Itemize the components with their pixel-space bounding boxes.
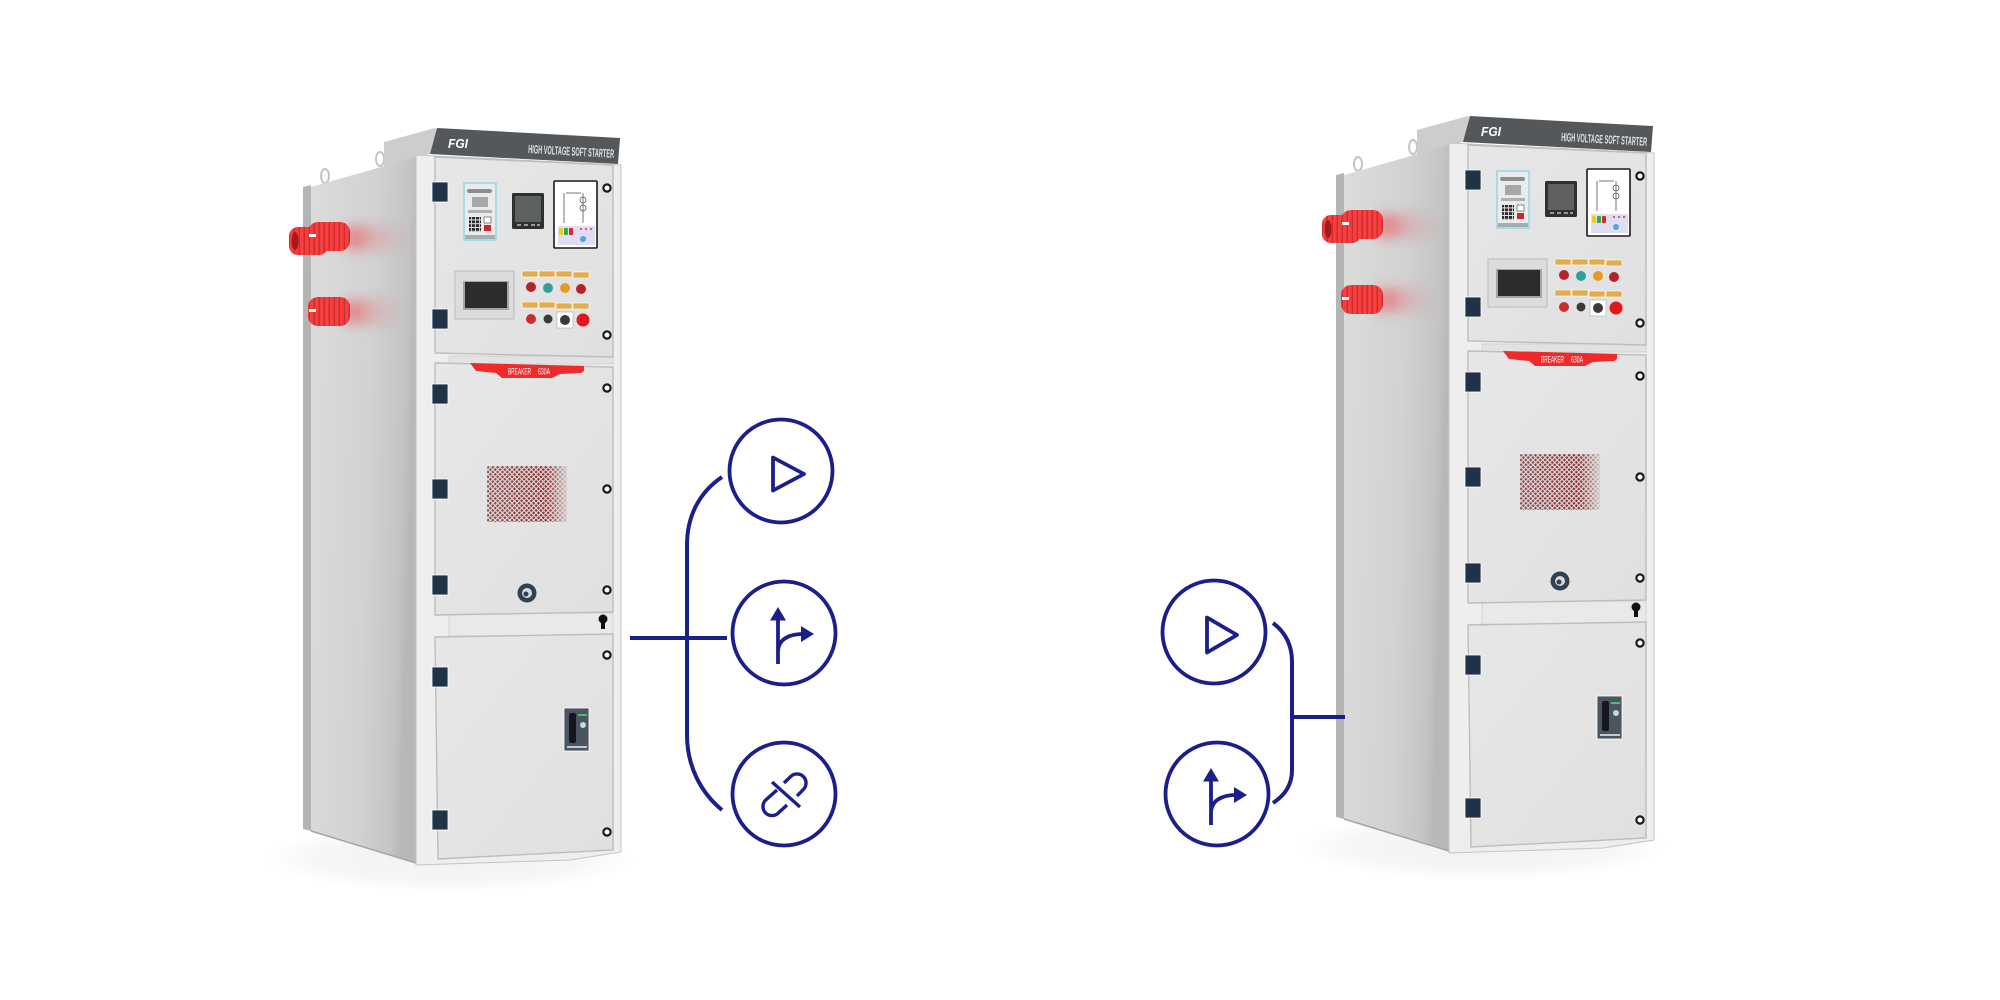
bushing opening [292,232,298,250]
keyhole [1632,602,1640,617]
emergency stop button [1610,302,1622,314]
rear roof panel [1417,116,1471,156]
selector switches [1576,300,1606,316]
status diagram panel [1587,169,1630,236]
connector bracket: right two functions [1273,623,1345,803]
hinges [1465,170,1481,818]
indicator lamps [526,282,586,324]
status diagram panel [554,181,597,248]
top lugs [321,152,384,183]
floor shadow [265,824,635,892]
red breaker tag [1503,351,1617,366]
emergency stop button [576,314,590,326]
door lock [518,584,536,602]
rear roof panel [384,128,438,168]
icon: branching arrow in circle (right) [1166,742,1268,846]
side panel bottom edge [1344,819,1449,851]
roof label band [430,128,620,164]
screws [1636,172,1644,824]
red breaker tag: 630A [538,366,550,376]
lower frame divider strip [449,613,613,636]
frame divider strip [1482,344,1646,352]
lower bushing [1341,285,1383,314]
rear upper bushing [289,227,328,255]
rear upper bushing [1322,215,1361,243]
brand logo: FGI [1481,124,1501,139]
bushing pins [1342,222,1349,300]
upper door [435,157,613,357]
bushing pins [309,234,316,312]
indicator labels [1555,259,1622,297]
power meter [1545,181,1577,217]
screws [603,184,611,836]
auxiliary switch [564,708,589,751]
cabinet: right soft starter: HIGH VOLTAGE SOFT STARTER [1561,130,1648,149]
touch screen [455,271,514,319]
side panel strip [303,185,311,831]
heat glow [1379,214,1441,312]
icon: broken link in circle (left) [732,742,836,846]
side panel bottom edge [311,831,416,863]
lower door [1468,622,1646,847]
mesh viewing window [487,466,567,522]
upper door [1468,145,1646,345]
touch screen [1488,259,1547,307]
connector bracket: left three functions [630,477,727,810]
icon: branching arrow in circle (left) [732,582,836,684]
side panel [311,157,416,863]
power meter [512,193,544,229]
red breaker tag [470,363,584,378]
side panel [1344,145,1449,851]
middle door [435,363,613,615]
keyhole [598,614,608,629]
top lugs [1354,140,1417,171]
red breaker tag: 630A [1571,354,1583,364]
cabinet: left soft starter: HIGH VOLTAGE SOFT STARTER [528,142,615,161]
icon: play in circle (right) [1162,580,1266,684]
red breaker tag: BREAKER [508,366,531,376]
door lock [1550,572,1570,590]
heat glow [346,226,408,324]
lower door [435,634,613,859]
front upper bushing [1341,210,1383,239]
front frame [1449,143,1654,853]
middle door [1468,351,1646,603]
indicator labels [522,271,589,309]
roof label band [1463,116,1653,152]
red breaker tag: BREAKER [1541,354,1564,364]
lower frame divider strip [1482,601,1646,624]
selector switches [544,312,573,328]
frame divider strip [449,356,613,364]
auxiliary switch [1597,696,1622,739]
hinges [432,182,448,830]
protection relay [463,182,497,241]
indicator lamps [1559,270,1619,312]
side panel strip [1336,173,1344,819]
floor shadow [1298,812,1668,880]
cabinet: right soft starter [1298,116,1668,880]
cabinet: left soft starter [265,128,635,892]
protection relay [1496,170,1530,229]
front frame [416,155,621,865]
mesh viewing window [1520,454,1600,510]
brand logo: FGI [448,136,468,151]
front upper bushing [308,222,350,251]
lower bushing [308,297,350,326]
icon: play in circle (left) [730,420,832,522]
bushing opening [1324,220,1332,238]
